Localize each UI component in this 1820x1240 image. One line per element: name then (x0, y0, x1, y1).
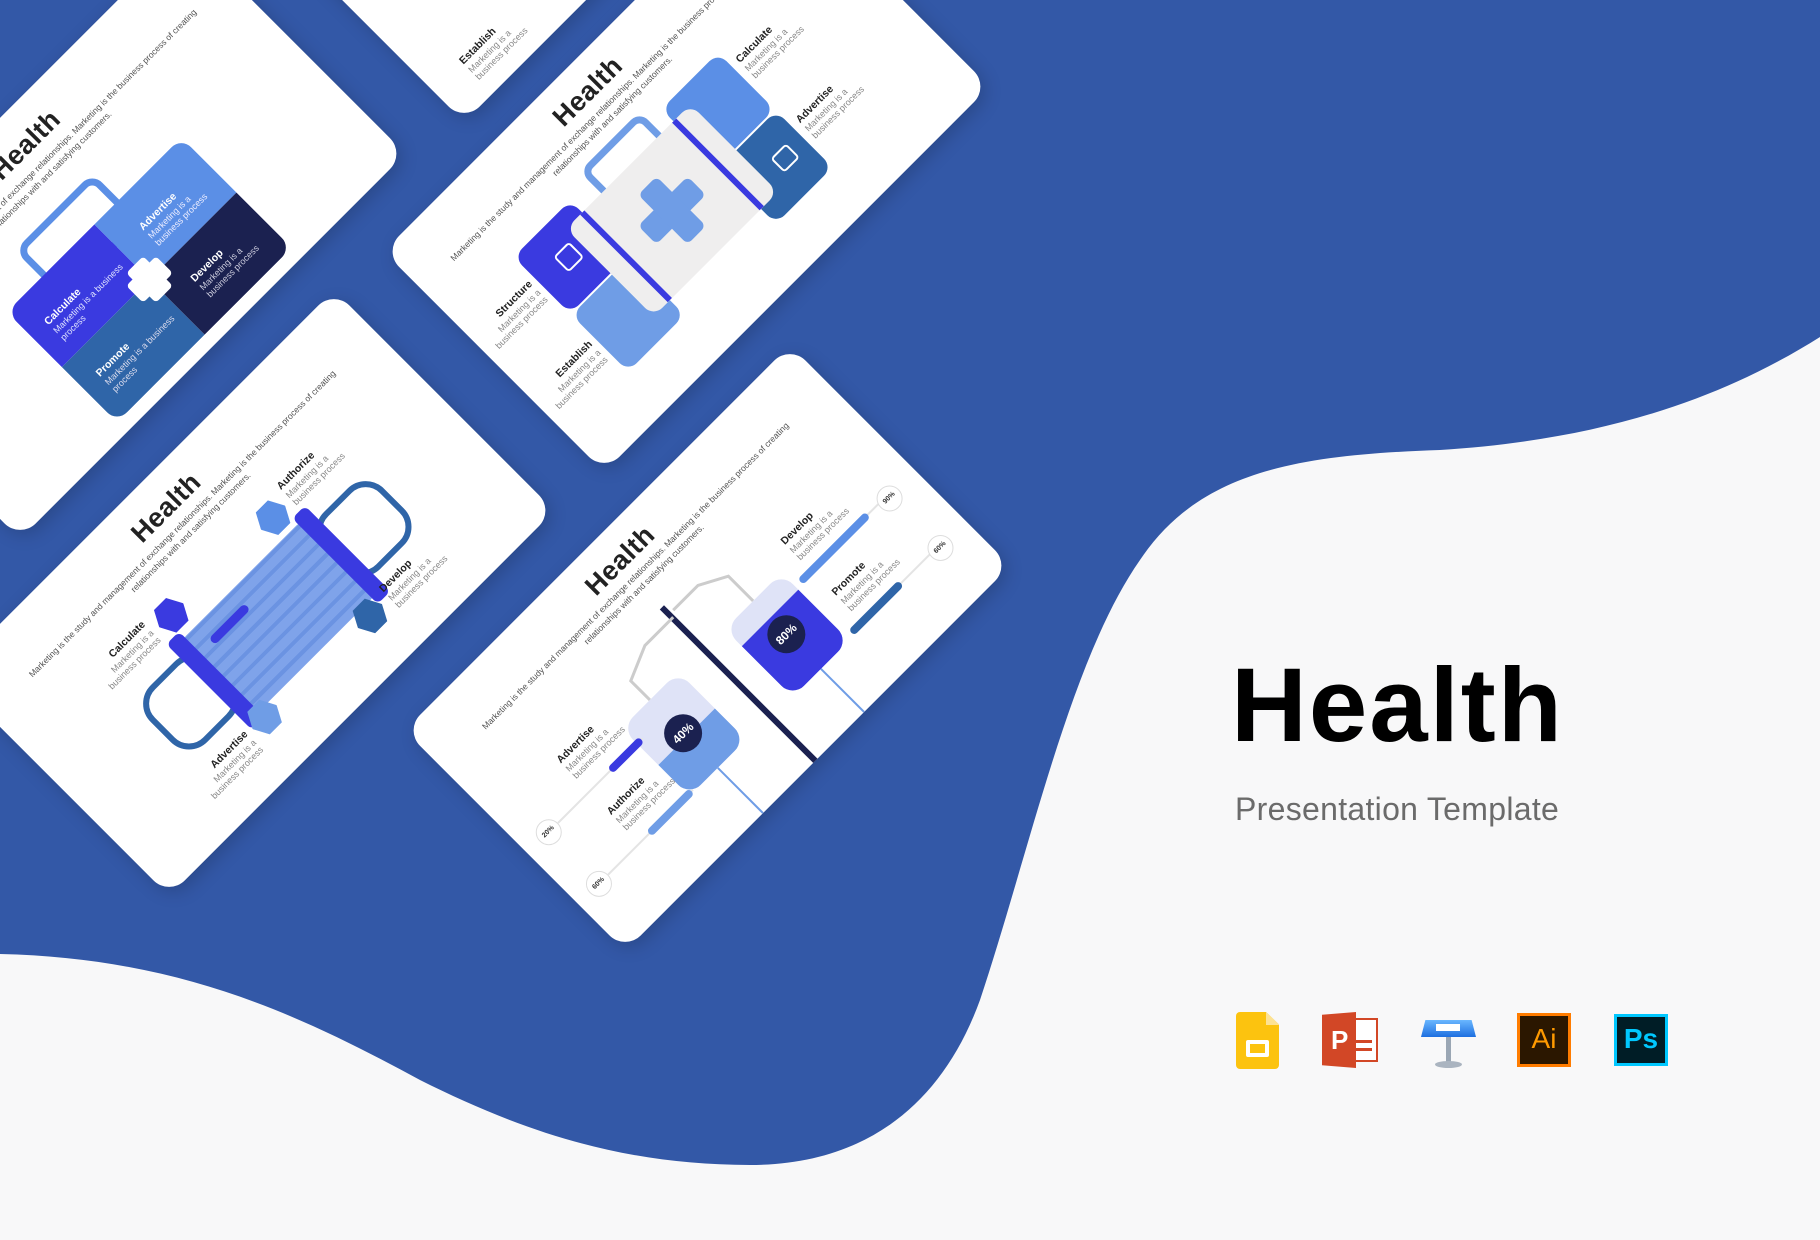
item: advertise: Marketing is a (564, 727, 610, 774)
ear loop right (306, 470, 422, 587)
item: promote (829, 535, 954, 634)
label: develop: Marketing is a business process (386, 553, 450, 610)
cell: calculate: Marketing is a business process (51, 262, 125, 342)
item: develop (779, 486, 902, 583)
card: iv bag slide (405, 345, 1010, 951)
label: calculate: Marketing is a business process (743, 24, 806, 80)
item: develop: business process (795, 506, 851, 562)
item: authorize: 60% (591, 876, 606, 891)
title: Health (1231, 647, 1564, 764)
item: develop: 90% (882, 491, 897, 506)
hex: develop (352, 598, 388, 634)
hex: advertise (247, 700, 282, 734)
paragraph: relationships with and satisfying customers. (129, 470, 253, 594)
title: Health (579, 519, 661, 601)
square: calculate (661, 53, 775, 166)
label: advertise: Marketing is a business process (803, 84, 866, 140)
hex: calculate (154, 598, 188, 633)
title: Health (547, 50, 628, 132)
cell: develop (150, 193, 292, 335)
item: promote: 60% (933, 540, 948, 555)
bag: 80% (725, 573, 849, 697)
icon row (1236, 1012, 1668, 1069)
bag: 40% (622, 672, 746, 796)
mask body (178, 517, 379, 719)
label: structure: Marketing is a business process (493, 287, 550, 351)
item: advertise: business process (571, 724, 627, 781)
handle (14, 173, 142, 300)
card: mask slide (0, 290, 554, 896)
cell: promote (62, 279, 205, 422)
cell: develop: Develop (188, 247, 226, 284)
label: establish: Establish (553, 338, 595, 380)
item: authorize: Authorize (605, 775, 647, 817)
icon: white cross (126, 256, 173, 303)
label: advertise: Advertise (794, 83, 836, 126)
divider (660, 605, 820, 765)
title: Health (125, 467, 207, 548)
cell: develop: Marketing is a business process (198, 243, 261, 299)
handle (579, 111, 682, 214)
icon: illustrator: Ai (1532, 1023, 1556, 1054)
square: establish (572, 258, 685, 372)
label: advertise: Advertise (208, 728, 250, 771)
hangers (629, 574, 865, 814)
label: authorize: Marketing is a business process (284, 451, 347, 507)
icon: illustrator (1517, 1013, 1571, 1067)
kit body (566, 104, 778, 316)
item: promote: Promote (829, 560, 868, 598)
item: develop: Marketing is a (788, 508, 834, 555)
label: calculate: Calculate (106, 619, 148, 660)
subtitle: Presentation Template (1235, 791, 1559, 827)
label: advertise: Marketing is a business process (209, 738, 265, 801)
label: establish partial: Marketing is a (466, 28, 513, 75)
icon: cross (638, 176, 706, 244)
icon: keynote (1421, 1020, 1476, 1068)
label: authorize: Authorize (274, 450, 317, 492)
paragraph: Marketing is the study and management of exchange relationships. Marketing is the business process of creating (480, 421, 791, 731)
bag: 40%: 40% (670, 720, 697, 747)
label: calculate: Calculate (734, 24, 775, 65)
cell: advertise: Marketing is a business process (146, 191, 209, 248)
cell: advertise: Advertise (137, 190, 179, 233)
label: establish partial: business process (473, 25, 530, 82)
label: structure: Structure (493, 278, 535, 320)
icon: powerpoint (1322, 1012, 1378, 1068)
cell: promote: Promote (94, 341, 132, 379)
label: establish: Marketing is a business process (554, 348, 610, 411)
card: first aid kit slide (384, 0, 989, 472)
item: develop: Develop (779, 510, 816, 547)
cell: promote: Marketing is a business process (103, 313, 176, 394)
paragraph: relationships with and satisfying customers. (550, 54, 674, 178)
cell: advertise (94, 137, 236, 279)
cell: calculate: Calculate (42, 286, 84, 328)
card: quadrant health slide (0, 0, 405, 539)
square: structure (514, 200, 627, 314)
mask bands (166, 632, 265, 730)
item: promote: business process (846, 557, 902, 613)
item: promote: Marketing is a (839, 559, 885, 606)
item: advertise: Advertise (554, 723, 597, 766)
paragraph: Marketing is the study and management of exchange relationships. Marketing is the business process of creating (27, 368, 338, 679)
label: calculate: Marketing is a business process (107, 628, 163, 691)
ear loop left (132, 644, 249, 760)
item: advertise (536, 723, 644, 846)
icon: google slides (1236, 1012, 1279, 1069)
icon: photoshop (1614, 1014, 1668, 1066)
item: authorize (586, 775, 694, 897)
icon: powerpoint: P (1331, 1025, 1348, 1055)
icon: photoshop: Ps (1624, 1023, 1658, 1054)
card: partial top card (244, 0, 849, 122)
paragraph: relationships with and satisfying customers. (582, 522, 706, 646)
square: advertise (719, 111, 833, 224)
quadrant grid (12, 143, 286, 416)
label: establish partial: Establish (457, 25, 499, 67)
hex: authorize (256, 500, 290, 535)
item: advertise: 20% (541, 824, 556, 839)
label: develop: Develop (377, 557, 414, 595)
bag: 80%: 80% (773, 621, 800, 648)
cell: calculate (7, 224, 150, 367)
item: authorize: business process (621, 776, 677, 832)
item: authorize: Marketing is a (614, 778, 660, 825)
